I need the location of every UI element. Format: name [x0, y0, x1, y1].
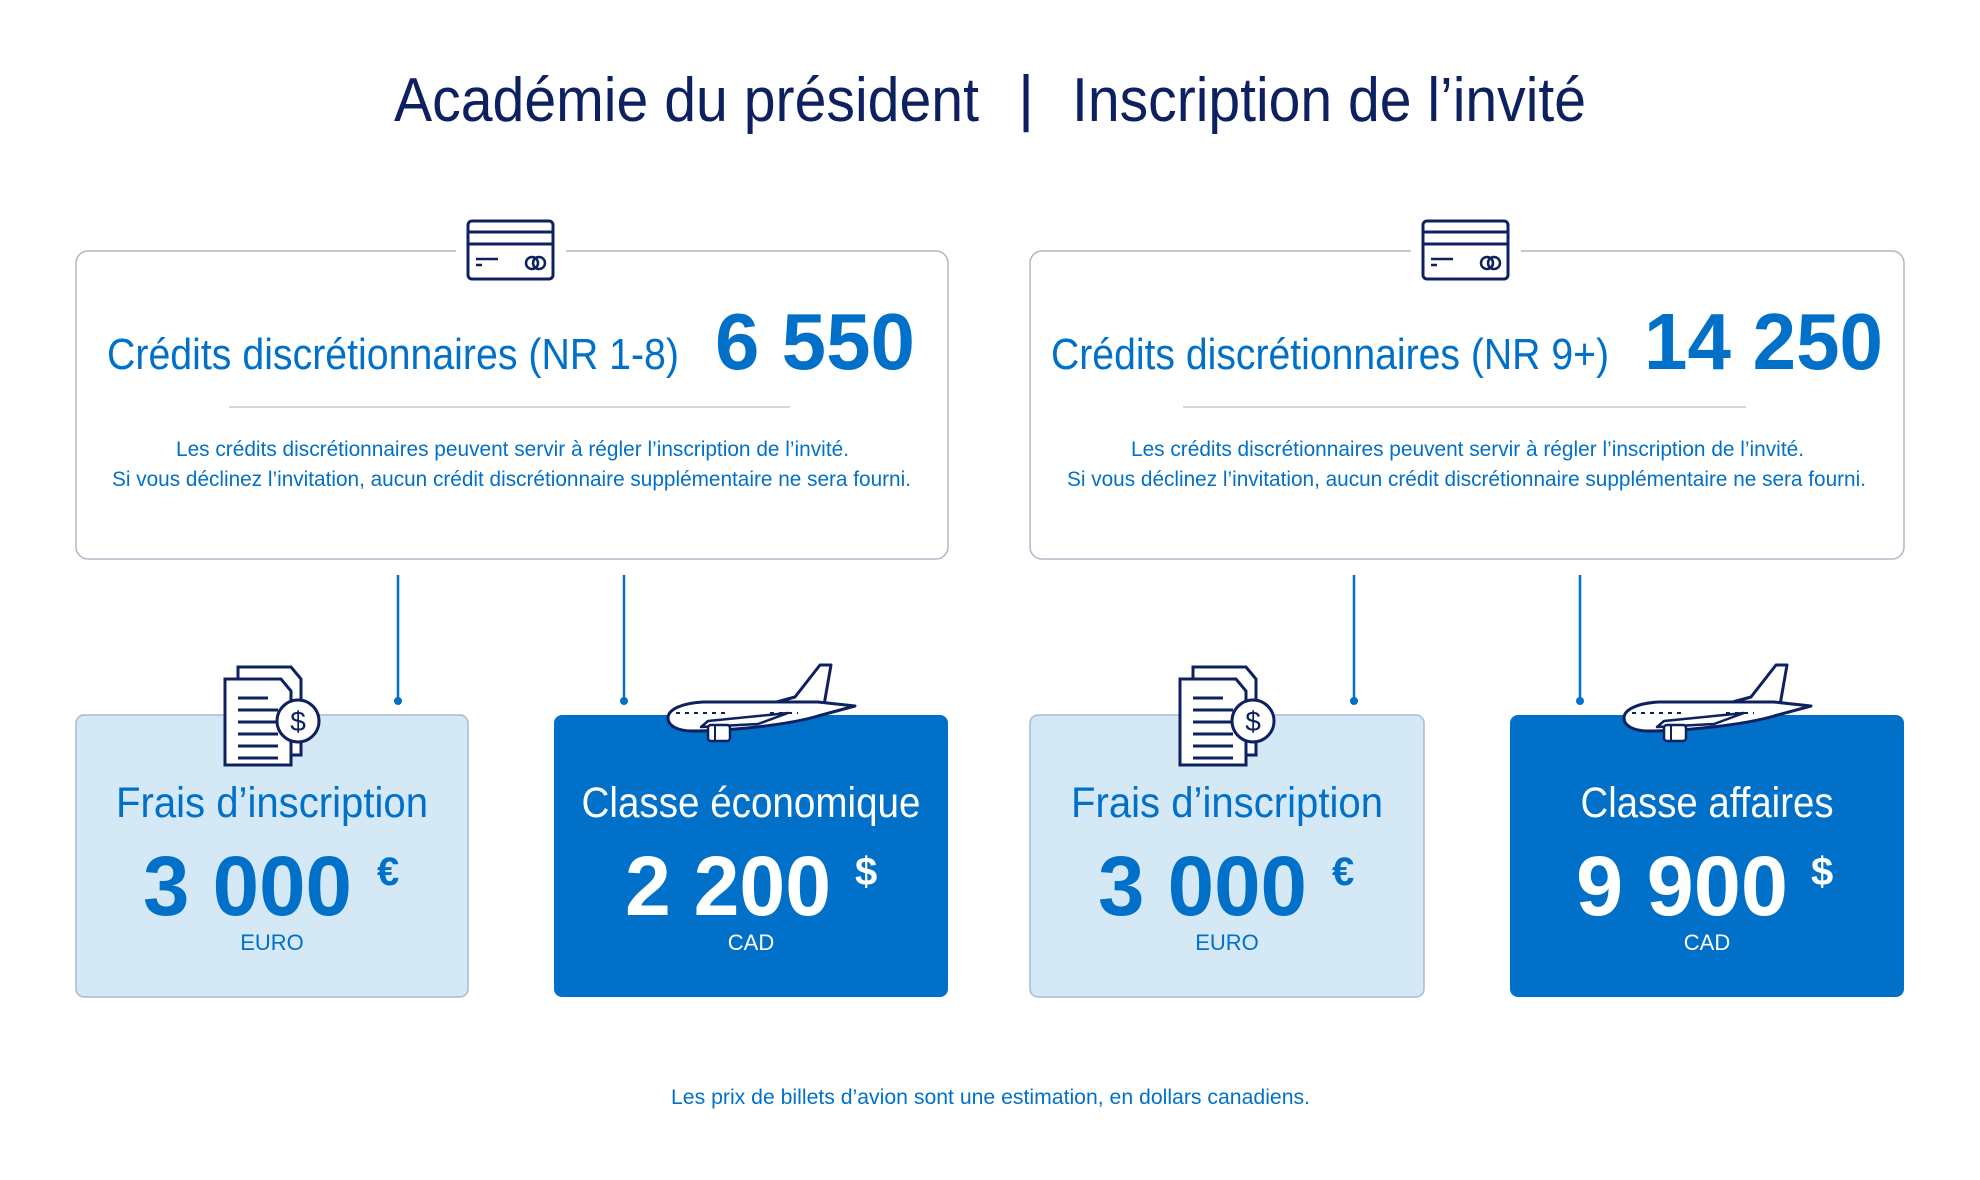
text block: credits description: Les crédits discrétionnaires peuvent servir à régler l’inscription de l’invité.: [176, 438, 849, 461]
icon: document with dollar: [1180, 667, 1274, 765]
footer note: Les prix de billets d’avion sont une estimation, en dollars canadiens.: [671, 1086, 1310, 1109]
title: Académie du président: [394, 66, 979, 135]
panel: credits NR 9+: [1030, 215, 1904, 559]
text block: credits description: [1067, 438, 1866, 491]
panel: registration fee left: [76, 667, 468, 997]
panel: business class: Classe affaires: [1580, 779, 1834, 827]
number: 14 250: 14 250: [1644, 297, 1883, 386]
panel: registration fee right: [1030, 667, 1424, 997]
panel: economy class: $: [855, 850, 877, 894]
title: |: [1018, 64, 1034, 133]
panel: business class: $: [1811, 850, 1833, 894]
number: 6 550: 6 550: [715, 297, 915, 386]
panel: registration fee left: EURO: [240, 930, 304, 955]
icon: document with dollar: [225, 667, 319, 765]
panel: registration fee right: EURO: [1195, 930, 1259, 955]
panel: registration fee left: 3 000: [143, 839, 352, 933]
panel: economy class: CAD: [728, 930, 774, 955]
heading: credits NR 9+: Crédits discrétionnaires (NR 9+): [1051, 330, 1609, 379]
panel: registration fee left: €: [377, 850, 399, 894]
heading: credits NR 1-8: Crédits discrétionnaires (NR 1-8): [107, 330, 679, 379]
panel: economy class: [554, 665, 948, 997]
text block: credits description: Si vous déclinez l’invitation, aucun crédit discrétionnaire supplémentaire ne sera fourni.: [112, 468, 911, 491]
icon: plane: [1624, 665, 1811, 741]
panel: business class: 9 900: [1576, 839, 1788, 933]
title: Inscription de l’invité: [1072, 66, 1586, 135]
text block: credits description: Les crédits discrétionnaires peuvent servir à régler l’inscription de l’invité.: [1131, 438, 1804, 461]
icon: credit card: [1423, 221, 1508, 279]
panel: registration fee left: Frais d’inscription: [116, 779, 428, 827]
text block: credits description: [112, 438, 911, 491]
panel: credits NR 1-8: [76, 215, 948, 559]
panel: business class: CAD: [1684, 930, 1730, 955]
panel: registration fee right: 3 000: [1098, 839, 1307, 933]
panel: registration fee right: Frais d’inscription: [1071, 779, 1383, 827]
text block: credits description: Si vous déclinez l’invitation, aucun crédit discrétionnaire supplémentaire ne sera fourni.: [1067, 468, 1866, 491]
panel: registration fee right: €: [1332, 850, 1354, 894]
icon: plane: [668, 665, 855, 741]
arrow: connectors: [394, 575, 1584, 705]
icon: credit card: [468, 221, 553, 279]
panel: economy class: Classe économique: [582, 779, 920, 827]
panel: economy class: 2 200: [625, 839, 831, 933]
panel: business class: [1510, 665, 1904, 997]
title: [394, 64, 1586, 135]
